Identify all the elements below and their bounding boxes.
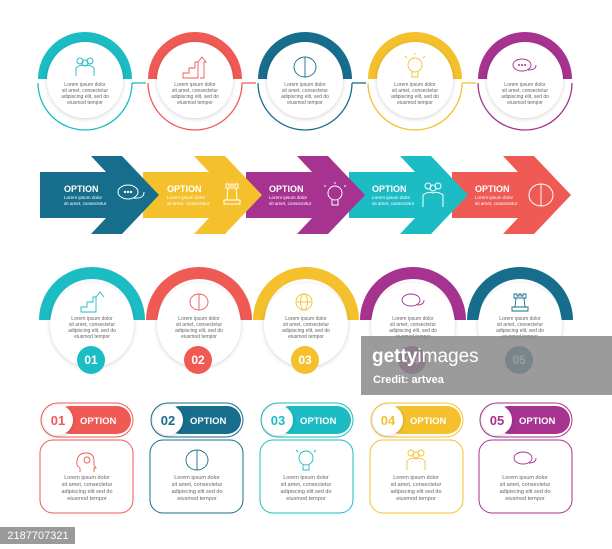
card 01: sit amet, consectetur — [62, 482, 113, 488]
arrow 2 yellow: Lorem ipsum dolor — [167, 195, 206, 200]
card 05: Lorem ipsum dolor — [502, 475, 548, 481]
card 01 — [40, 403, 133, 513]
arrow 2 yellow — [143, 156, 262, 234]
number badge — [77, 346, 105, 374]
step 2 circle: adipiscing elit, sed do — [171, 94, 219, 100]
icon: lightbulb — [296, 450, 316, 470]
step 5 circle — [478, 32, 572, 130]
icon: head with gear — [77, 453, 96, 472]
step 04: adipiscing elit, sed do — [389, 328, 437, 334]
icon: growth — [81, 292, 104, 312]
step 4 circle: adipiscing elit, sed do — [391, 94, 439, 100]
step 01 — [39, 267, 145, 374]
card 01: OPTION — [80, 416, 117, 427]
watermark band: Credit: artvea — [373, 374, 445, 386]
arrow 1 dark blue: Lorem ipsum dolor — [64, 195, 103, 200]
step 01: 01 — [84, 353, 98, 367]
icon: chat — [402, 294, 424, 306]
arrow 1 dark blue: sit amet, consectetur — [64, 201, 107, 206]
card 04: Lorem ipsum dolor — [393, 475, 439, 481]
icon: brain — [190, 294, 208, 310]
arrow 5 red: OPTION — [475, 184, 510, 194]
step 04: 04 — [405, 353, 419, 367]
card 04 — [370, 403, 463, 513]
arrow 2 yellow: OPTION — [167, 184, 202, 194]
icon: people — [407, 450, 425, 470]
step 1 circle: eiusmod tempor — [67, 100, 103, 106]
card 03 — [260, 403, 353, 513]
step 4 circle: Lorem ipsum dolor — [394, 82, 436, 88]
step 02: 02 — [191, 353, 205, 367]
step 02: eiusmod tempor — [181, 334, 217, 340]
arrow 3 purple: sit amet, consectetur — [269, 201, 312, 206]
step 03 — [253, 267, 359, 374]
step 4 circle: sit amet, consectetur — [392, 88, 438, 94]
arrow 1 dark blue — [40, 156, 159, 234]
card 05: sit amet, consectetur — [500, 482, 551, 488]
step 5 circle: adipiscing elit, sed do — [501, 94, 549, 100]
step 1 circle: adipiscing elit, sed do — [61, 94, 109, 100]
icon: lightbulb — [405, 53, 425, 77]
step 02: sit amet, consectetur — [176, 322, 222, 328]
arrow 3 purple — [246, 156, 365, 234]
card 03: 03 — [271, 413, 285, 428]
step 5 circle: sit amet, consectetur — [502, 88, 548, 94]
card 03: adipiscing elit sed do — [280, 489, 332, 495]
card 05: 05 — [490, 413, 504, 428]
icon: chat — [514, 452, 536, 464]
step 01: adipiscing elit, sed do — [68, 328, 116, 334]
icon: people — [76, 58, 94, 76]
card 03: Lorem ipsum dolor — [283, 475, 329, 481]
step 05: Lorem ipsum dolor — [499, 316, 541, 322]
step 01: Lorem ipsum dolor — [71, 316, 113, 322]
icon: brain — [186, 450, 208, 470]
card 05: OPTION — [519, 416, 556, 427]
icon: chat bubbles — [118, 185, 144, 199]
icon: rook — [512, 294, 528, 311]
step 03: adipiscing elit, sed do — [282, 328, 330, 334]
row 2: arrow process — [40, 156, 571, 234]
card 02: sit amet, consectetur — [172, 482, 223, 488]
step 2 circle: eiusmod tempor — [177, 100, 213, 106]
step 04: sit amet, consectetur — [390, 322, 436, 328]
icon: people — [423, 183, 443, 207]
row 4: option cards — [40, 403, 572, 513]
card 03: OPTION — [300, 416, 337, 427]
step 02: adipiscing elit, sed do — [175, 328, 223, 334]
step 02 — [146, 267, 252, 374]
step 3 circle: Lorem ipsum dolor — [284, 82, 326, 88]
step 03: 03 — [298, 353, 312, 367]
step 05: sit amet, consectetur — [497, 322, 543, 328]
icon: growth chart — [183, 57, 206, 78]
card 04: adipiscing elit sed do — [390, 489, 442, 495]
arrow 1 dark blue: OPTION — [64, 184, 99, 194]
icon: chat bubbles — [513, 59, 536, 71]
watermark band: gettyimages — [372, 346, 479, 367]
step 1 circle — [38, 32, 146, 130]
step 01: eiusmod tempor — [74, 334, 110, 340]
card 04: 04 — [381, 413, 396, 428]
image id label: 2187707321 — [7, 530, 69, 542]
card 04: OPTION — [410, 416, 447, 427]
step 03: eiusmod tempor — [288, 334, 324, 340]
step 1 circle: sit amet, consectetur — [62, 88, 108, 94]
card 02: eiusmod tempor — [177, 496, 217, 502]
icon: brain — [294, 57, 316, 77]
icon: chess rook — [224, 184, 240, 204]
step 05 — [467, 267, 573, 374]
watermark band — [361, 336, 612, 395]
image id label — [0, 527, 75, 544]
card 03: eiusmod tempor — [286, 496, 326, 502]
arrow 3 purple: Lorem ipsum dolor — [269, 195, 308, 200]
step 05: adipiscing elit, sed do — [496, 328, 544, 334]
card 05: eiusmod tempor — [505, 496, 545, 502]
card 02 — [150, 403, 243, 513]
step 1 circle: Lorem ipsum dolor — [64, 82, 106, 88]
card 01: Lorem ipsum dolor — [64, 475, 110, 481]
card 03: sit amet, consectetur — [281, 482, 332, 488]
card 05 — [479, 403, 572, 513]
card 02: OPTION — [190, 416, 227, 427]
step 05: eiusmod tempor — [502, 334, 538, 340]
icon: globe — [296, 294, 312, 310]
icon: brain — [529, 184, 553, 206]
arrow 4 teal: OPTION — [372, 184, 407, 194]
card 01: 01 — [51, 413, 65, 428]
step 5 circle: Lorem ipsum dolor — [504, 82, 546, 88]
step 02: Lorem ipsum dolor — [178, 316, 220, 322]
step 5 circle: eiusmod tempor — [507, 100, 543, 106]
step 2 circle — [148, 32, 256, 130]
row 1: circle steps — [38, 32, 572, 130]
arrow 5 red: Lorem ipsum dolor — [475, 195, 514, 200]
icon: lightbulb — [324, 182, 346, 205]
row 3: numbered semicircle steps — [39, 267, 573, 374]
step 4 circle — [368, 32, 476, 130]
card 02: Lorem ipsum dolor — [174, 475, 220, 481]
step 3 circle: sit amet, consectetur — [282, 88, 328, 94]
step 3 circle: adipiscing elit, sed do — [281, 94, 329, 100]
card 02: 02 — [161, 413, 175, 428]
arrow 4 teal: Lorem ipsum dolor — [372, 195, 411, 200]
card 02: adipiscing elit sed do — [171, 489, 223, 495]
card 04: eiusmod tempor — [396, 496, 436, 502]
step 04 — [360, 267, 466, 374]
arrow 3 purple: OPTION — [269, 184, 304, 194]
step 05: 05 — [512, 353, 526, 367]
step 4 circle: eiusmod tempor — [397, 100, 433, 106]
step 04: Lorem ipsum dolor — [392, 316, 434, 322]
arrow 4 teal: sit amet, consectetur — [372, 201, 415, 206]
arrow 2 yellow: sit amet, consectetur — [167, 201, 210, 206]
step 03: Lorem ipsum dolor — [285, 316, 327, 322]
arrow 5 red — [452, 156, 571, 234]
step 04: eiusmod tempor — [395, 334, 431, 340]
step 2 circle: Lorem ipsum dolor — [174, 82, 216, 88]
step 3 circle — [258, 32, 366, 130]
step 01: sit amet, consectetur — [69, 322, 115, 328]
card 05: adipiscing elit sed do — [499, 489, 551, 495]
arrow 4 teal — [349, 156, 468, 234]
step 3 circle: eiusmod tempor — [287, 100, 323, 106]
step 2 circle: sit amet, consectetur — [172, 88, 218, 94]
arrow 5 red: sit amet, consectetur — [475, 201, 518, 206]
step 03: sit amet, consectetur — [283, 322, 329, 328]
card 01: eiusmod tempor — [67, 496, 107, 502]
card 01: adipiscing elit sed do — [61, 489, 113, 495]
card 04: sit amet, consectetur — [391, 482, 442, 488]
